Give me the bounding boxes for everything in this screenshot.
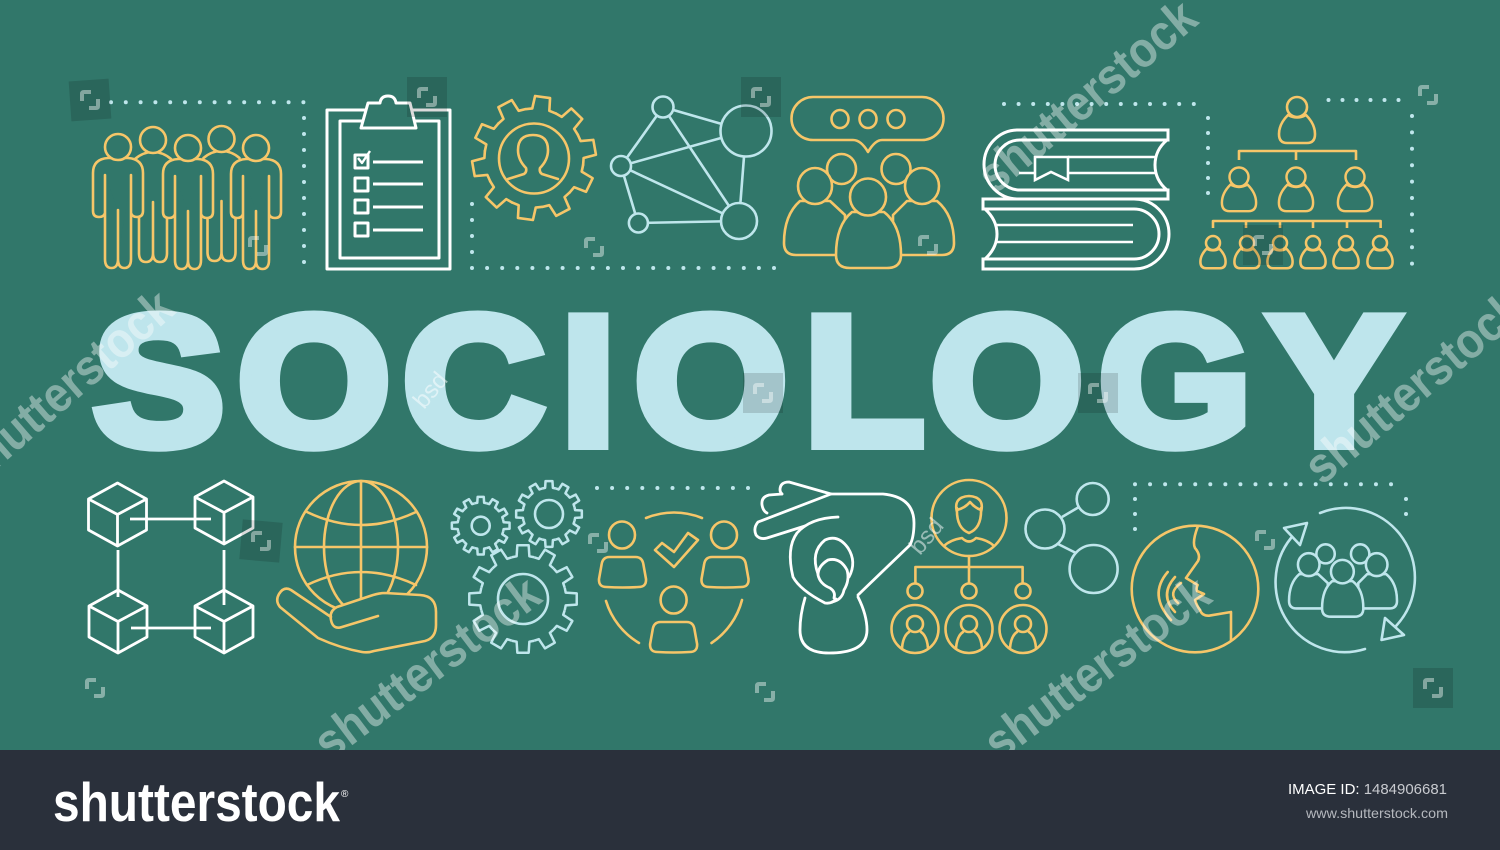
- registered mark: ®: [341, 789, 349, 800]
- icon: blockchain cubes: [88, 481, 253, 653]
- icon: stack of books: [983, 130, 1169, 269]
- watermark overlay: shutterstock: [303, 565, 551, 771]
- icon: crowd with speech bubble: [784, 97, 954, 268]
- title: SOCIOLOGY: [93, 279, 1400, 484]
- icon: speaking face: [1132, 526, 1258, 652]
- watermark overlay: shutterstock: [973, 565, 1221, 771]
- icon: gear with person: [463, 88, 605, 228]
- icon: group of five standing people: [93, 126, 281, 269]
- watermark overlay: bsd: [408, 367, 453, 414]
- watermark overlay: bsd: [904, 513, 949, 560]
- icon: network nodes: [611, 96, 772, 239]
- footer bar: [0, 750, 1500, 850]
- icon: organisation hierarchy: [1200, 97, 1393, 268]
- dotted frames: [111, 100, 1412, 530]
- website: www.shutterstock.com: [1305, 805, 1448, 821]
- icon: clipboard checklist: [327, 96, 450, 269]
- image id: IMAGE ID: 1484906681: [1288, 781, 1447, 798]
- icon: globe on hand: [277, 481, 436, 652]
- footer logo: shutterstock: [53, 771, 340, 833]
- icon: leader and team tree: [892, 480, 1046, 653]
- icon: team agreement circle: [599, 512, 749, 652]
- icon: share nodes: [1026, 483, 1118, 593]
- icon: people in cycle arrows: [1276, 508, 1415, 652]
- icon: three gears: [452, 481, 582, 653]
- icon: hand holding person: [755, 482, 914, 653]
